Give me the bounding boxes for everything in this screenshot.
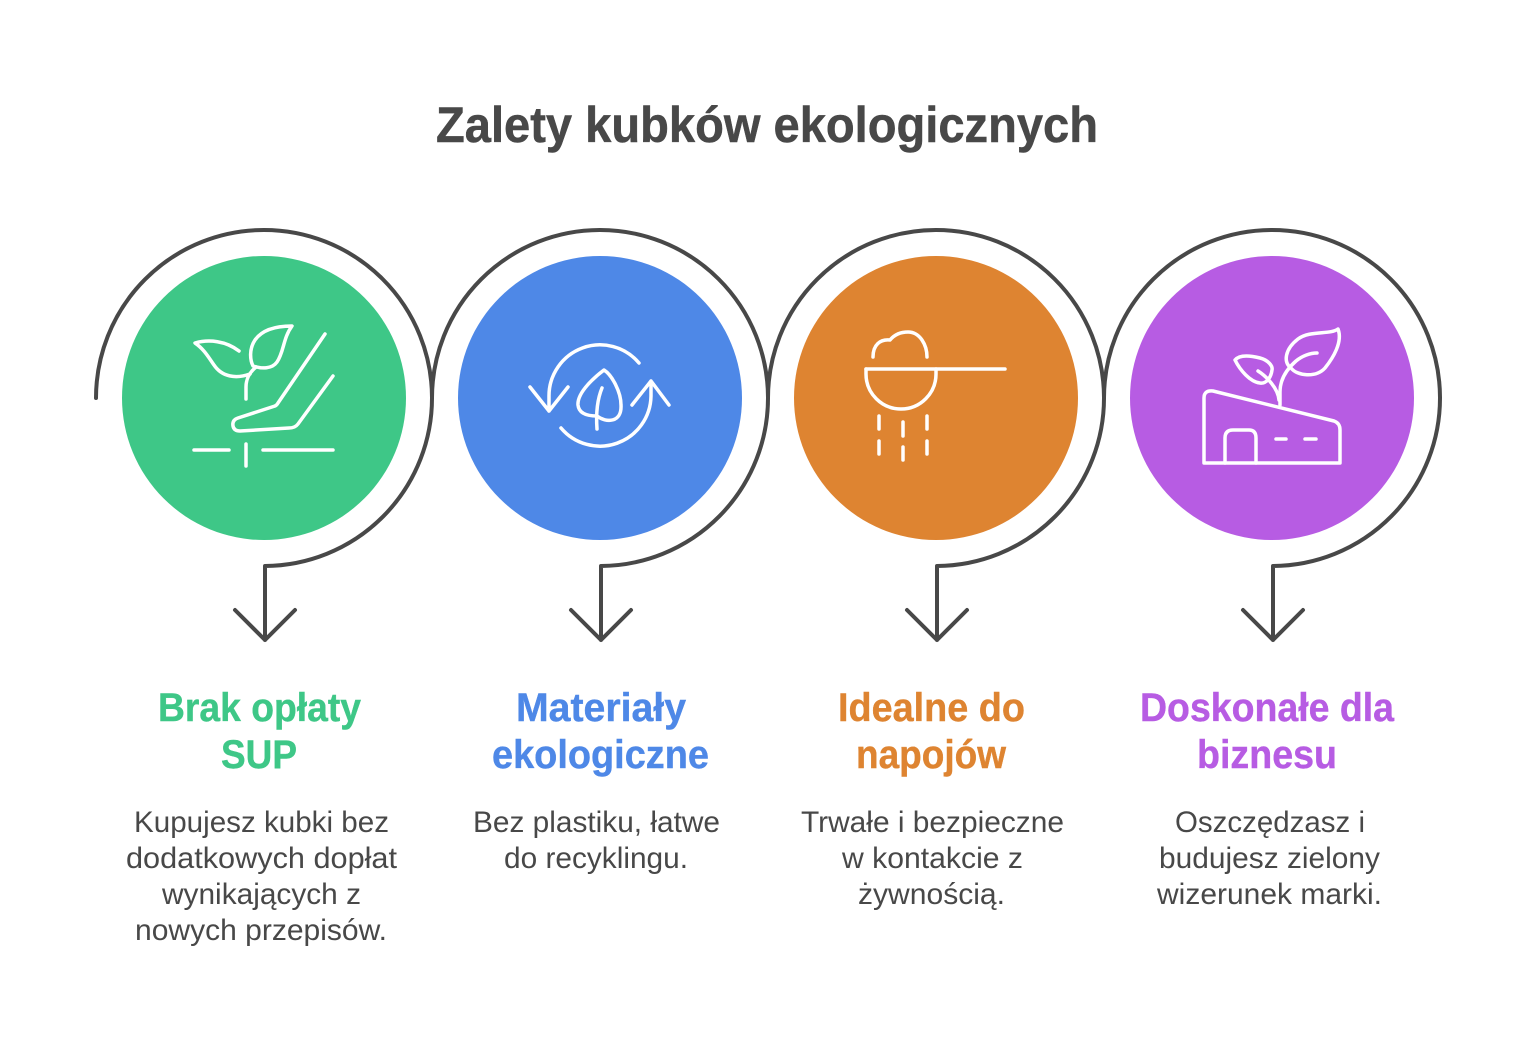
- title: Zalety kubków ekologicznych: [436, 97, 1098, 153]
- heading: Brak opłaty: [158, 686, 362, 730]
- icon: green factory: [1204, 329, 1340, 463]
- description: dodatkowych dopłat: [126, 842, 398, 875]
- panel: step 2 graphic: [432, 230, 768, 640]
- heading: [838, 686, 1025, 777]
- icon: recycling leaf: [530, 345, 669, 446]
- description: [801, 806, 1064, 911]
- text block: Materiały ekologiczne: [473, 686, 720, 875]
- ring arrow 3: [768, 230, 1104, 640]
- heading: Idealne do: [838, 686, 1025, 730]
- description: Oszczędzasz i: [1175, 806, 1365, 839]
- description: Bez plastiku, łatwe: [473, 806, 720, 839]
- heading: SUP: [221, 733, 297, 777]
- description: Trwałe i bezpieczne: [801, 806, 1064, 839]
- description: Kupujesz kubki bez: [134, 806, 389, 839]
- panel: step 3 graphic: [768, 230, 1104, 640]
- description: żywnością.: [858, 878, 1005, 911]
- heading: [492, 686, 709, 777]
- description: [126, 806, 398, 947]
- description: wizerunek marki.: [1156, 878, 1382, 911]
- heading: Materiały: [516, 686, 687, 730]
- description: budujesz zielony: [1159, 842, 1380, 875]
- heading: [1140, 686, 1395, 777]
- panel: step 4 graphic: [1104, 230, 1440, 640]
- ring arrow 1: [96, 230, 432, 640]
- text block: Doskonałe dla biznesu: [1140, 686, 1395, 911]
- green circle: [122, 256, 406, 540]
- heading: napojów: [856, 733, 1007, 777]
- orange circle: [794, 256, 1078, 540]
- blue circle: [458, 256, 742, 540]
- text block: Brak opłaty SUP: [126, 686, 398, 947]
- heading: Doskonałe dla: [1140, 686, 1395, 730]
- icon: scoop with pouring powder: [866, 332, 1005, 460]
- ring arrow 4: [1104, 230, 1440, 640]
- description: w kontakcie z: [841, 842, 1023, 875]
- purple circle: [1130, 256, 1414, 540]
- icon: plant and hand: [194, 326, 333, 466]
- heading: ekologiczne: [492, 733, 709, 777]
- heading: biznesu: [1197, 733, 1337, 777]
- text block: Idealne do napojów: [801, 686, 1064, 911]
- heading: [158, 686, 362, 777]
- description: wynikających z: [161, 878, 361, 911]
- description: [473, 806, 720, 875]
- description: nowych przepisów.: [135, 914, 387, 947]
- ring arrow 2: [432, 230, 768, 640]
- panel: step 1 graphic: [96, 230, 432, 640]
- description: [1156, 806, 1382, 911]
- description: do recyklingu.: [504, 842, 688, 875]
